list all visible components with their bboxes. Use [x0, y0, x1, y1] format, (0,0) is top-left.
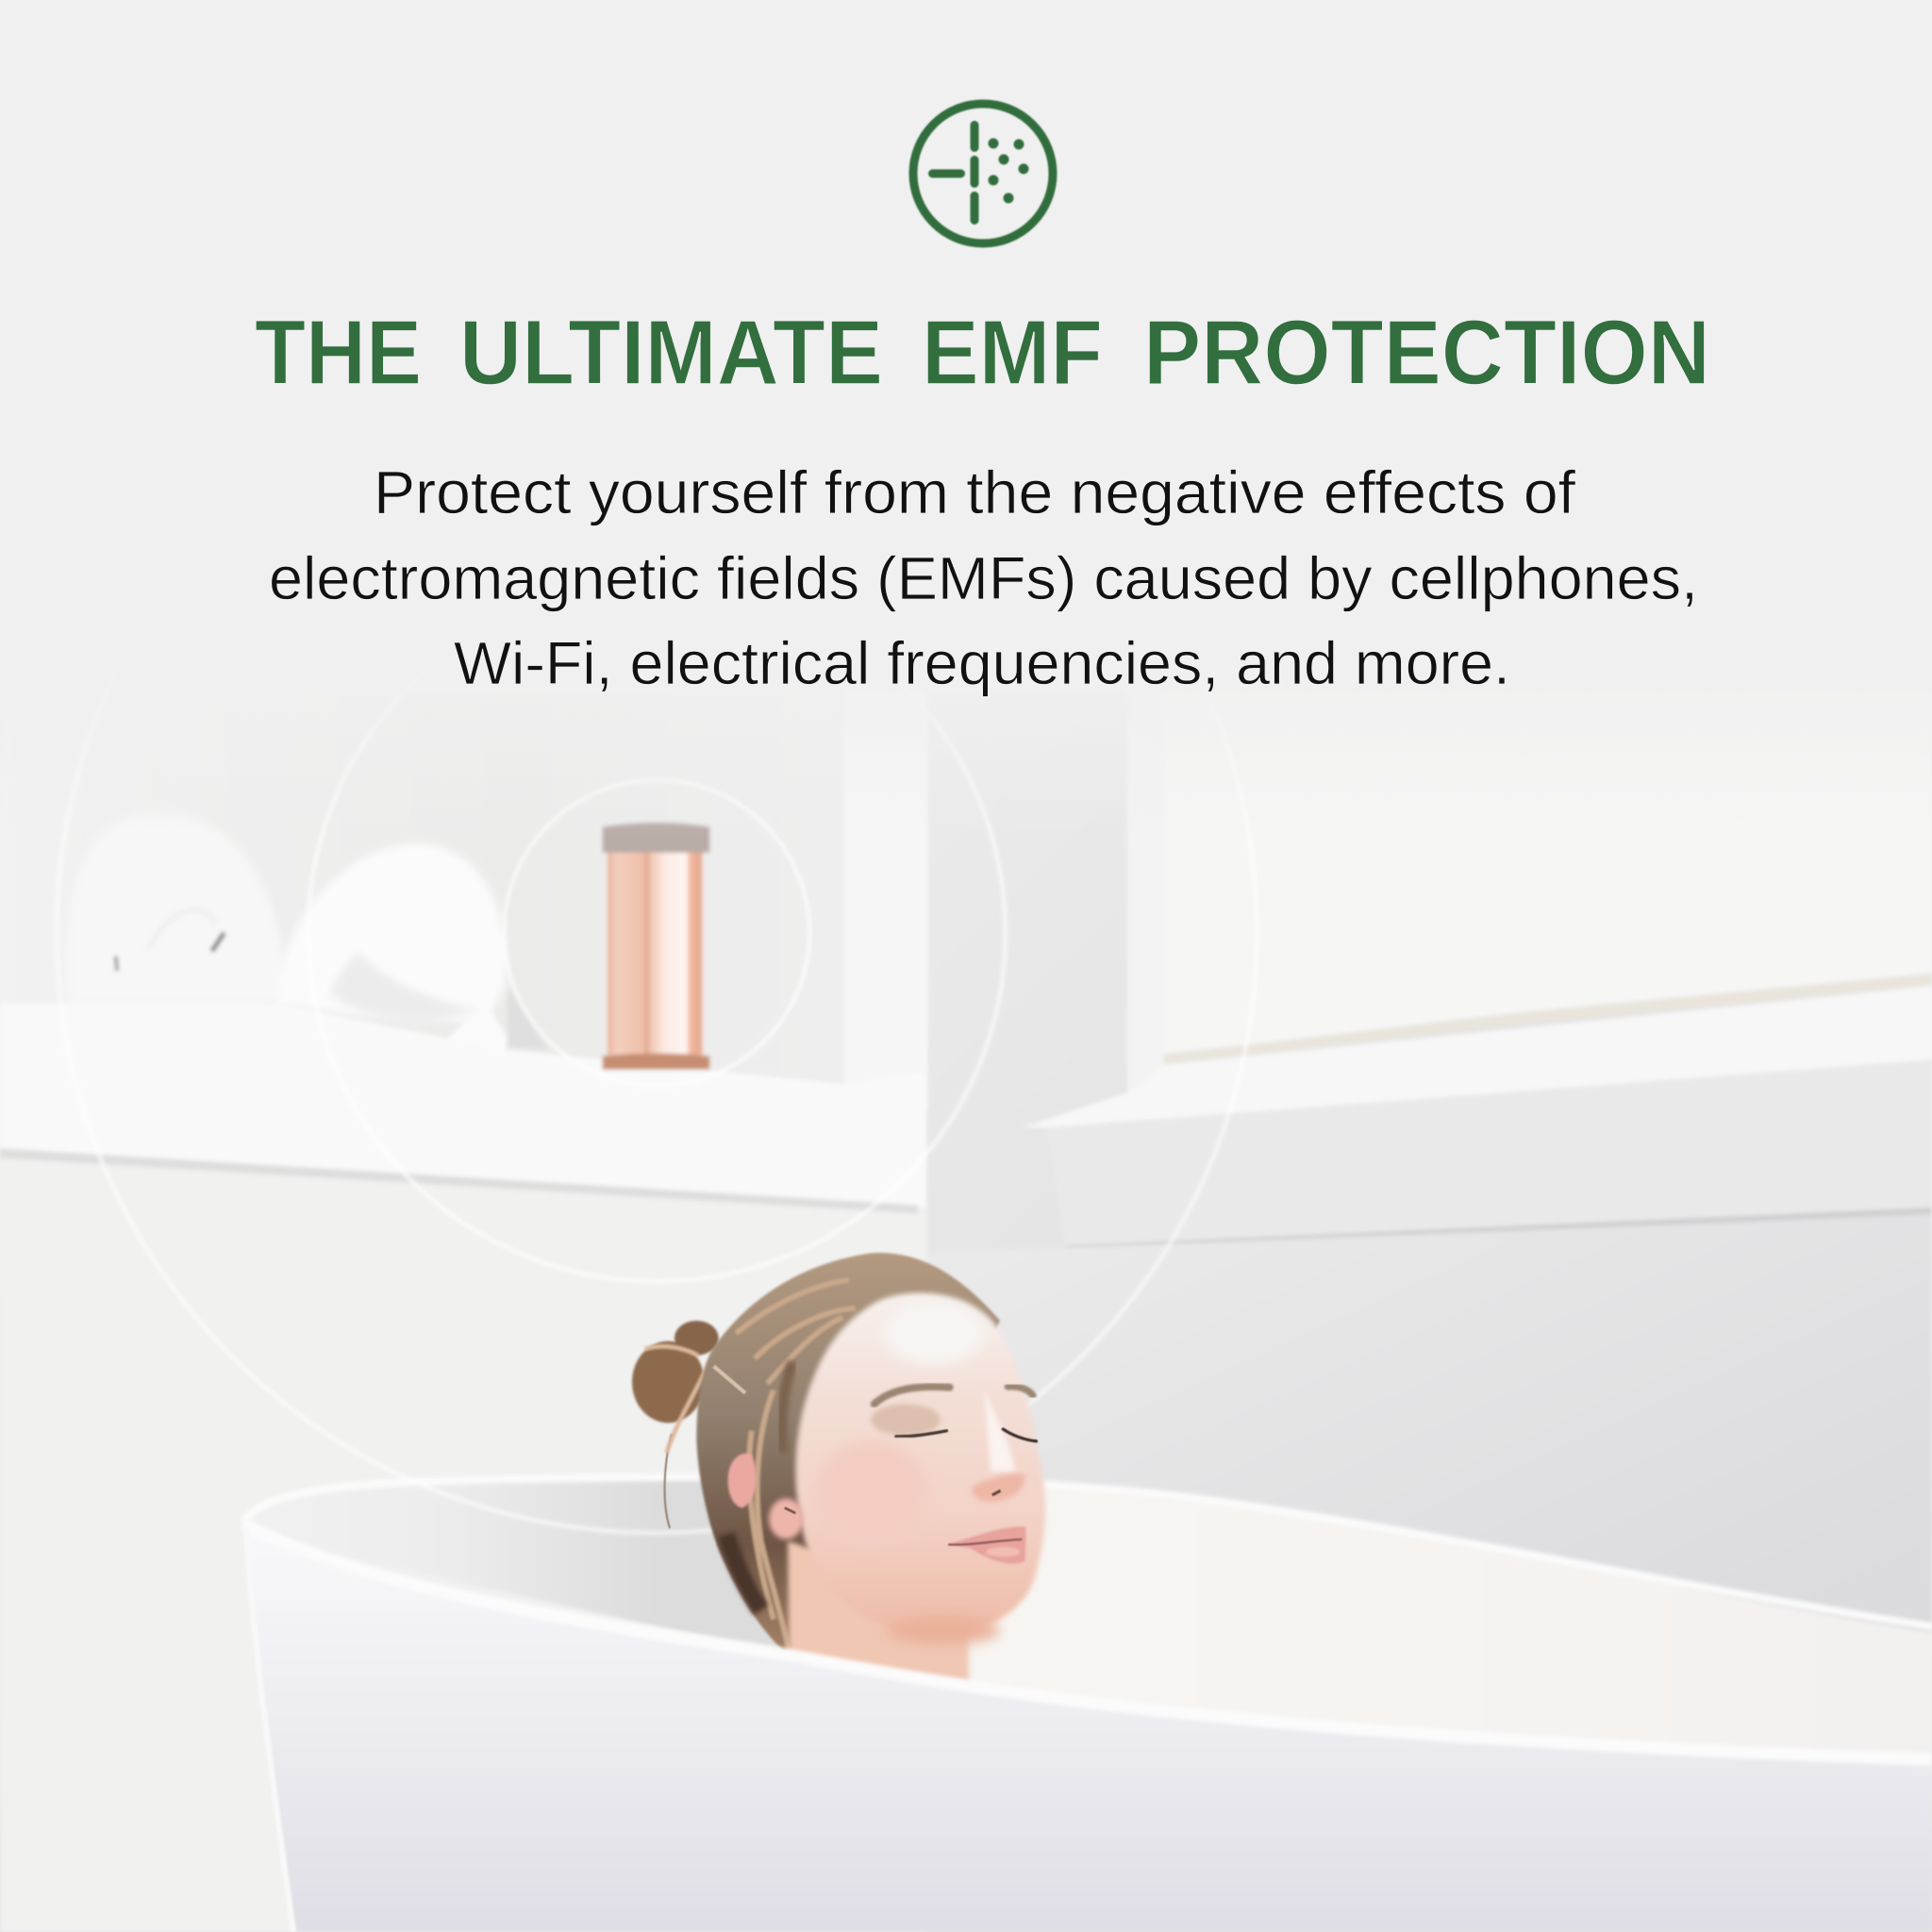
- hair: [696, 1253, 1000, 1658]
- window sill: [1023, 986, 1932, 1127]
- woman: [632, 1253, 1045, 1687]
- device cap: [603, 823, 709, 853]
- nose: [972, 1474, 1025, 1502]
- left eyelid shadow: [871, 1404, 941, 1436]
- tub inner: [244, 1474, 1932, 1774]
- ear: [728, 1454, 804, 1540]
- niche back wall: [0, 690, 850, 1109]
- nostril: [992, 1491, 1001, 1495]
- tub left edge highlight: [246, 1528, 293, 1932]
- chin shadow: [887, 1616, 1000, 1644]
- title: [255, 301, 1710, 404]
- description text: [269, 458, 1698, 697]
- niche right side wall: [844, 690, 928, 1109]
- title: PROTECTION: [1143, 301, 1710, 404]
- device body: [608, 850, 702, 1055]
- tub front rim highlight: [244, 1524, 1932, 1759]
- window sill line: [1164, 974, 1932, 1064]
- hair bun: [632, 1321, 719, 1453]
- left brow: [874, 1387, 950, 1404]
- panel shadow line: [1066, 1208, 1932, 1252]
- cheek: [814, 1441, 927, 1547]
- left eye: [896, 1431, 946, 1437]
- copper EMF device: [603, 823, 709, 1070]
- window recess: [1134, 690, 1932, 1054]
- icon: EMF shield: [913, 104, 1053, 243]
- right eye: [1003, 1429, 1036, 1441]
- description text: Protect yourself from the negative effects of: [374, 458, 1575, 526]
- description text: Wi-Fi, electrical frequencies, and more.: [454, 629, 1510, 697]
- window frame: [1127, 690, 1164, 1096]
- nose highlight: [984, 1390, 1016, 1472]
- wall panel under window: [1047, 1059, 1932, 1247]
- right brow: [1008, 1387, 1033, 1395]
- towel: right: [277, 843, 548, 1054]
- lips: [948, 1526, 1025, 1563]
- shelf shadow line: [0, 1148, 918, 1214]
- wisps of hair: [665, 1434, 672, 1528]
- tub back rim highlight: [244, 1477, 1932, 1626]
- lower right wall: [924, 1215, 1932, 1675]
- title: EMF: [922, 301, 1103, 404]
- neck: [788, 1541, 969, 1687]
- forehead highlight: [884, 1302, 984, 1365]
- title: ULTIMATE: [459, 301, 883, 404]
- lower left wall: [0, 1158, 926, 1932]
- shelf front: [0, 1004, 926, 1208]
- concentric signal rings: [57, 333, 1257, 1533]
- towel: left: [66, 813, 286, 1004]
- tub front: [244, 1522, 1932, 1932]
- right wall: [924, 690, 1932, 1675]
- face: [795, 1293, 1045, 1644]
- title: THE: [255, 301, 422, 404]
- device base: [603, 1054, 709, 1070]
- top fade over the photo: [0, 0, 1932, 838]
- description text: electromagnetic fields (EMFs) caused by cellphones,: [269, 544, 1698, 612]
